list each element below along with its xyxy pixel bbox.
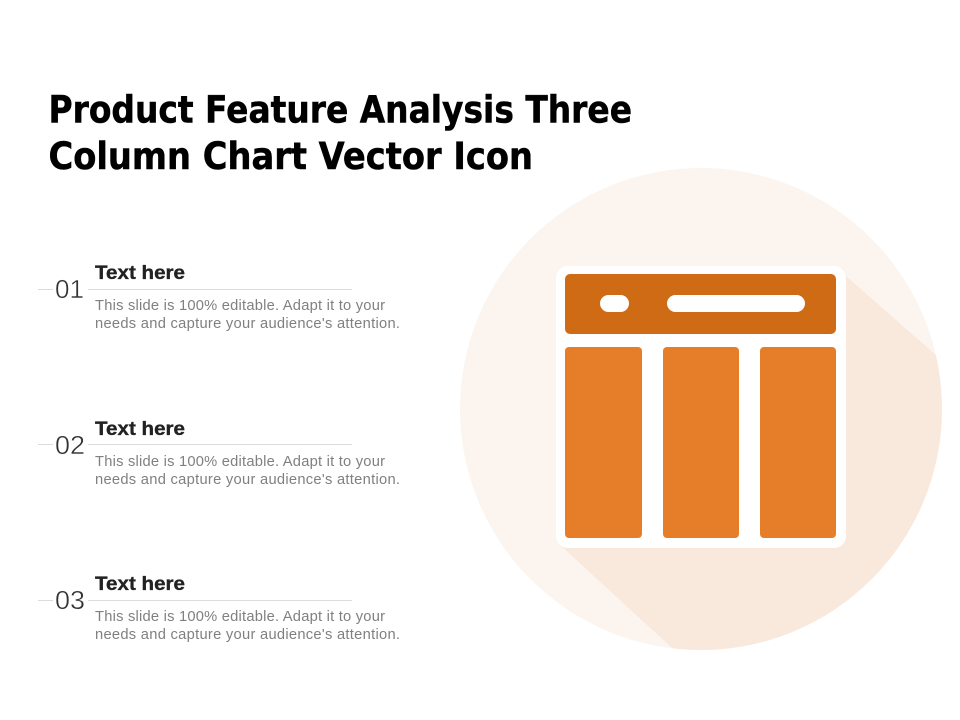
column 3	[760, 347, 836, 538]
list item 02	[38, 419, 400, 488]
number 02: 02	[55, 432, 85, 460]
header pill long	[667, 295, 805, 312]
column 2	[663, 347, 739, 538]
body text 01: This slide is 100% editable. Adapt it to your	[95, 298, 385, 314]
body text 01	[95, 298, 400, 332]
list item 01	[38, 263, 400, 332]
column 1	[565, 347, 642, 538]
body text 03: This slide is 100% editable. Adapt it to your	[95, 609, 385, 625]
white card	[556, 266, 846, 548]
body text 03	[95, 609, 400, 643]
heading 01: Text here	[95, 263, 185, 284]
heading 02: Text here	[95, 419, 185, 440]
header pill small	[600, 295, 629, 312]
title	[48, 88, 632, 178]
background circle	[460, 168, 942, 650]
heading 03: Text here	[95, 574, 185, 595]
long shadow	[560, 276, 960, 660]
title: Product Feature Analysis Three	[48, 88, 632, 132]
body text 03: needs and capture your audience's attention.	[95, 627, 400, 643]
body text 01: needs and capture your audience's attention.	[95, 316, 400, 332]
header bar	[565, 274, 836, 334]
body text 02	[95, 454, 400, 488]
number 01: 01	[55, 276, 84, 304]
list item 03	[38, 574, 400, 643]
number 03: 03	[55, 587, 85, 615]
title: Column Chart Vector Icon	[48, 135, 533, 178]
body text 02: This slide is 100% editable. Adapt it to your	[95, 454, 385, 470]
body text 02: needs and capture your audience's attention.	[95, 472, 400, 488]
icon: three column chart in circle	[460, 168, 960, 660]
